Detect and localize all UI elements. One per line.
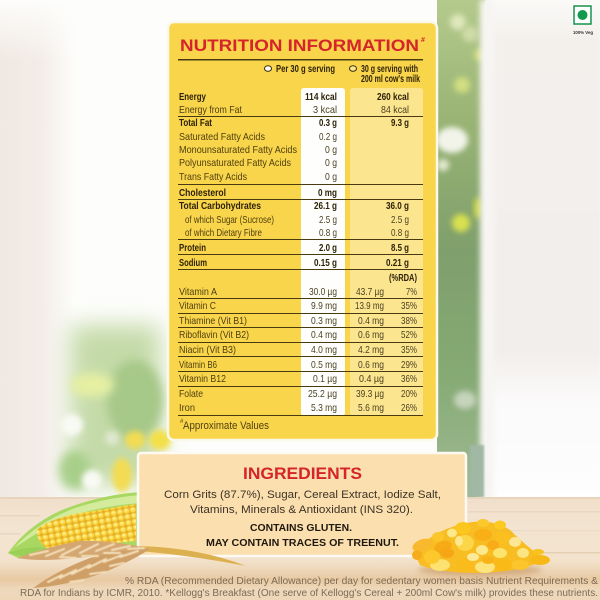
row: energy from fat: 3 kcal: [313, 104, 337, 116]
row: riboflavin: 52%: [401, 329, 417, 341]
row: sugar: [185, 214, 409, 226]
footnote: RDA disclaimer: RDA for Indians by ICMR, 2010. *Kellogg's Breakfast (One serve of Kellogg's Cereal + 200ml Cow's milk) provides these nutrients.: [20, 588, 598, 599]
row: vitamin A: [179, 286, 417, 298]
row: cholesterol: Cholesterol: [179, 187, 226, 199]
row: iron: 5.6 mg: [358, 402, 384, 414]
heading: ingredients: INGREDIENTS: [243, 464, 362, 483]
legend: 30 g serving with milk: 200 ml cow's milk: [361, 73, 420, 85]
row: vitamin B6: 0.6 mg: [358, 359, 384, 371]
footnote: approximate values: Approximate Values: [183, 420, 269, 432]
row: folate: Folate: [179, 388, 203, 400]
row: sugar: 2.5 g: [319, 214, 337, 226]
text: allergen warning: MAY CONTAIN TRACES OF TREENUT.: [206, 538, 399, 549]
row: total fat: Total Fat: [179, 117, 212, 129]
icon: 100% veg mark: 100% Veg: [573, 30, 593, 35]
row: vitamin B12: 36%: [401, 373, 417, 385]
row: riboflavin: 0.6 mg: [358, 329, 384, 341]
row: vitamin C: 35%: [401, 300, 417, 312]
footnote: RDA disclaimer: [20, 576, 598, 599]
row: protein: Protein: [179, 242, 206, 254]
row: total fat: 0.3 g: [319, 117, 337, 129]
row: dietary fibre: 0.8 g: [319, 227, 337, 239]
legend: per 30 g serving: Per 30 g serving: [276, 63, 335, 75]
row: thiamine: 0.3 mg: [311, 315, 337, 327]
row: vitamin B6: Vitamin B6: [179, 359, 217, 371]
heading: nutrition information: #: [421, 37, 425, 44]
row: sodium: Sodium: [179, 257, 207, 269]
row: niacin: Niacin (Vit B3): [179, 344, 236, 356]
row: thiamine: 0.4 mg: [358, 315, 384, 327]
row: saturated fatty acids: [179, 131, 337, 143]
corn cob illustration: [8, 492, 140, 558]
row: iron: 5.3 mg: [311, 402, 337, 414]
row: sodium: 0.21 g: [386, 257, 409, 269]
label: percent RDA: (%RDA): [389, 272, 417, 284]
row: dietary fibre: [185, 227, 409, 239]
icon: 100% veg mark: [572, 4, 593, 35]
row: sugar: of which Sugar (Sucrose): [185, 214, 274, 226]
row: polyunsaturated fatty acids: Polyunsaturated Fatty Acids: [179, 157, 291, 169]
column: per 30 g white background: [301, 88, 345, 416]
row: vitamin A: 43.7 µg: [356, 286, 384, 298]
row: vitamin B12: 0.4 µg: [359, 373, 384, 385]
row: vitamin B6: 29%: [401, 359, 417, 371]
legend: 30 g serving with milk: [350, 63, 420, 85]
row: vitamin C: [179, 300, 417, 312]
row: riboflavin: Riboflavin (Vit B2): [179, 329, 249, 341]
row: folate: 25.2 µg: [308, 388, 337, 400]
row: trans fatty acids: [179, 171, 337, 183]
row: trans fatty acids: 0 g: [325, 171, 337, 183]
text: allergen warning: [206, 523, 399, 549]
footnote: approximate values: #: [180, 419, 184, 425]
row: monounsaturated fatty acids: Monounsaturated Fatty Acids: [179, 144, 297, 156]
row: niacin: 35%: [401, 344, 417, 356]
row: total fat: [179, 117, 409, 129]
row: vitamin C: 13.9 mg: [355, 300, 384, 312]
row: folate: [179, 388, 417, 400]
corn kernels pile: [411, 519, 550, 576]
row: energy from fat: 84 kcal: [381, 104, 409, 116]
row: vitamin A: Vitamin A: [179, 286, 217, 298]
row: niacin: 4.2 mg: [358, 344, 384, 356]
row: saturated fatty acids: 0.2 g: [319, 131, 337, 143]
row: polyunsaturated fatty acids: 0 g: [325, 157, 337, 169]
text: allergen warning: CONTAINS GLUTEN.: [250, 523, 352, 534]
row: trans fatty acids: Trans Fatty Acids: [179, 171, 247, 183]
row: total carbohydrates: 36.0 g: [386, 200, 409, 212]
row: iron: [179, 402, 417, 414]
row: vitamin B12: 0.1 µg: [313, 373, 337, 385]
row: energy from fat: [179, 104, 409, 116]
row: energy: 114 kcal: [305, 91, 337, 103]
footnote: RDA disclaimer: % RDA (Recommended Dietary Allowance) per day for sedentary women basis Nutrient Requirements &: [125, 576, 598, 587]
row: saturated fatty acids: Saturated Fatty Acids: [179, 131, 265, 143]
wheat illustration: [17, 541, 246, 588]
text: ingredient list: Vitamins, Minerals & Antioxidant (INS 320).: [190, 504, 413, 516]
row: riboflavin: [179, 329, 417, 341]
row: sodium: [179, 257, 409, 269]
row: total carbohydrates: Total Carbohydrates: [179, 200, 261, 212]
row: thiamine: 38%: [401, 315, 417, 327]
panel: nutrition information: [168, 22, 437, 440]
row: energy: Energy: [179, 91, 206, 103]
row: monounsaturated fatty acids: 0 g: [325, 144, 337, 156]
legend: 30 g serving with milk: 30 g serving with: [361, 63, 418, 75]
row: dietary fibre: of which Dietary Fibre: [185, 227, 262, 239]
legend: per 30 g serving: [264, 63, 335, 75]
heading: nutrition information: NUTRITION INFORMATION: [180, 36, 419, 55]
row: folate: 20%: [401, 388, 417, 400]
row: folate: 39.3 µg: [356, 388, 384, 400]
text: ingredient list: Corn Grits (87.7%), Sugar, Cereal Extract, Iodize Salt,: [164, 489, 441, 501]
row: vitamin C: Vitamin C: [179, 300, 216, 312]
row: iron: 26%: [401, 402, 417, 414]
row: protein: [179, 242, 409, 254]
row: thiamine: [179, 315, 417, 327]
row: vitamin B6: 0.5 mg: [311, 359, 337, 371]
column: with milk light background: [350, 88, 423, 416]
row: niacin: [179, 344, 417, 356]
row: sugar: 2.5 g: [391, 214, 409, 226]
text: ingredient list: [164, 489, 441, 516]
row: cholesterol: 0 mg: [318, 187, 337, 199]
row: energy from fat: Energy from Fat: [179, 104, 242, 116]
row: vitamin B12: Vitamin B12: [179, 373, 226, 385]
row: niacin: 4.0 mg: [311, 344, 337, 356]
row: energy: [179, 91, 409, 103]
row: riboflavin: 0.4 mg: [311, 329, 337, 341]
row: vitamin C: 9.9 mg: [311, 300, 337, 312]
row: sodium: 0.15 g: [314, 257, 337, 269]
row: total fat: 9.3 g: [391, 117, 409, 129]
row: thiamine: Thiamine (Vit B1): [179, 315, 247, 327]
row: vitamin B12: [179, 373, 417, 385]
row: total carbohydrates: [179, 200, 409, 212]
row: vitamin A: 30.0 µg: [309, 286, 337, 298]
row: total carbohydrates: 26.1 g: [314, 200, 337, 212]
row: cholesterol: [179, 187, 337, 199]
panel: ingredients: [138, 453, 466, 556]
wooden table: [0, 497, 600, 600]
row: protein: 2.0 g: [319, 242, 337, 254]
row: dietary fibre: 0.8 g: [391, 227, 409, 239]
row: protein: 8.5 g: [391, 242, 409, 254]
row: vitamin B6: [179, 359, 417, 371]
row: energy: 260 kcal: [377, 91, 409, 103]
row: iron: Iron: [179, 402, 195, 414]
row: vitamin A: 7%: [406, 286, 417, 298]
